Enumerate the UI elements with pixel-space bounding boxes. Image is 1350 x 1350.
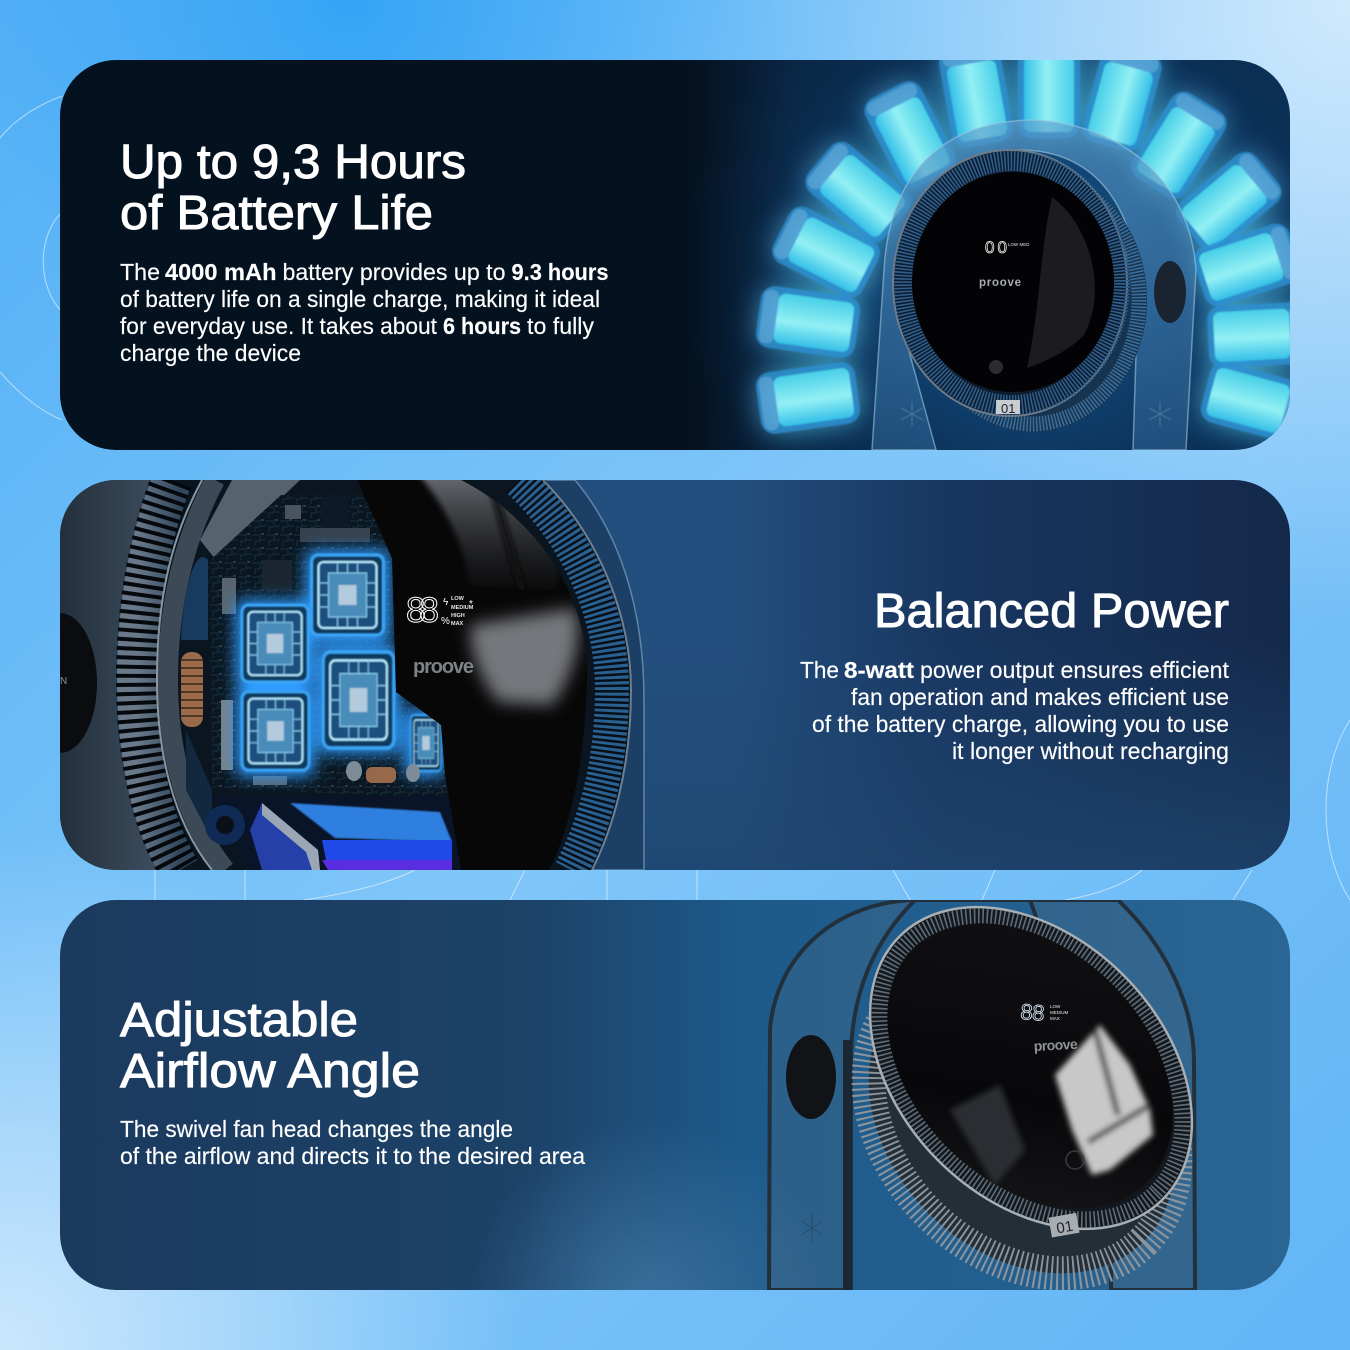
power description [800,657,1230,764]
power description: fan operation and makes efficient use [851,684,1229,710]
panel 2 background [60,480,1290,870]
mode tag 01: 01 [1001,401,1015,416]
display labels: LOW [1050,1004,1061,1009]
stand arch [769,900,1195,1290]
dark fan interior [118,480,632,870]
side knob [786,1035,836,1119]
fan grille ring [893,150,1127,416]
panel: battery life [60,38,1310,450]
airflow heading: Adjustable [120,994,358,1047]
circuit board [208,495,460,800]
battery description: for everyday use. It takes about [120,313,438,339]
fan stand arch [872,120,1196,450]
image: fan cutaway with circuit board [23,470,644,870]
airflow description: of the airflow and directs it to the desired area [120,1143,585,1169]
airflow heading [120,994,420,1098]
power heading: Balanced Power [874,585,1229,638]
board components [221,497,370,785]
panel: balanced power [23,470,1290,870]
power description: 8-watt [844,657,914,683]
image: tilted fan [769,844,1255,1335]
power description: The [800,657,839,683]
mode tag 01: 01 [1055,1218,1074,1237]
battery description: 9.3 hours [512,259,608,285]
airflow description: The swivel fan head changes the angle [120,1116,513,1142]
capacitors [346,761,420,783]
fan black head [912,172,1114,392]
display labels: MEDIUM [1050,1010,1068,1015]
batteries arc [754,38,1310,445]
brand logo: proove [413,656,474,678]
battery description: battery provides up to [282,259,506,285]
airflow description [120,1116,585,1169]
housing [60,480,165,870]
display labels: MAX [451,621,464,627]
battery description: charge the device [120,340,301,366]
battery description: The [120,259,160,285]
airflow heading: Airflow Angle [120,1045,420,1098]
power description: power output ensures efficient [920,657,1230,683]
side knob [23,613,97,753]
power description: of the battery charge, allowing you to use [812,711,1229,737]
display digits: 88 [1020,999,1045,1026]
display symbols: % [441,616,450,627]
display labels: LOW [451,596,465,602]
display labels: LOW MED [1008,242,1030,247]
display symbols [441,597,473,627]
display digits: 88 [406,591,439,630]
head button [989,360,1003,374]
display labels: MAX [1050,1016,1060,1021]
battery heading: of Battery Life [120,187,433,240]
right grille ring [518,480,631,870]
battery heading: Up to 9,3 Hours [120,136,466,189]
head reflections [415,470,578,705]
battery description: of battery life on a single charge, making it ideal [120,286,600,312]
mode tag 01 [996,400,1020,414]
chips glow [236,550,445,776]
interior struts [181,480,300,840]
panel 1 background [60,60,1290,450]
battery description: 6 hours [443,313,521,339]
head button [1066,1151,1084,1169]
side knob: N [60,676,67,687]
dim window reflection [950,1085,1025,1185]
side knob [1154,261,1186,323]
power description: it longer without recharging [952,738,1229,764]
battery description: to fully [527,313,594,339]
display labels: MEDIUM [451,605,474,611]
panel: adjustable airflow [60,844,1290,1335]
image: fan with glowing batteries [730,60,1290,450]
display digits: 00 [985,238,1007,257]
snowflake icons [901,402,1171,426]
snowflake icon [801,1214,823,1242]
copper coil [181,652,203,727]
back grille [807,905,1237,1335]
battery description [120,259,608,366]
panel 3 background [60,900,1290,1290]
glowing chips [242,555,441,771]
brand logo: proove [1033,1036,1078,1054]
black head [357,480,587,870]
lower neon module [205,796,460,870]
display symbols: * [469,599,473,610]
display symbols: ϟ [443,597,449,608]
display labels [1050,1004,1068,1021]
mode tag 01 [1048,1213,1080,1238]
window reflection [1055,1025,1153,1175]
stand arm [100,480,644,870]
reflection on head [1027,197,1095,368]
display labels: HIGH [451,613,465,619]
fan back cylinder [964,190,1147,432]
grille ring [807,844,1255,1292]
battery heading [120,136,466,240]
left grille ring [137,480,225,870]
brand logo: proove [979,277,1021,289]
display labels [451,596,474,627]
black head [831,867,1229,1265]
battery description: 4000 mAh [165,259,276,285]
